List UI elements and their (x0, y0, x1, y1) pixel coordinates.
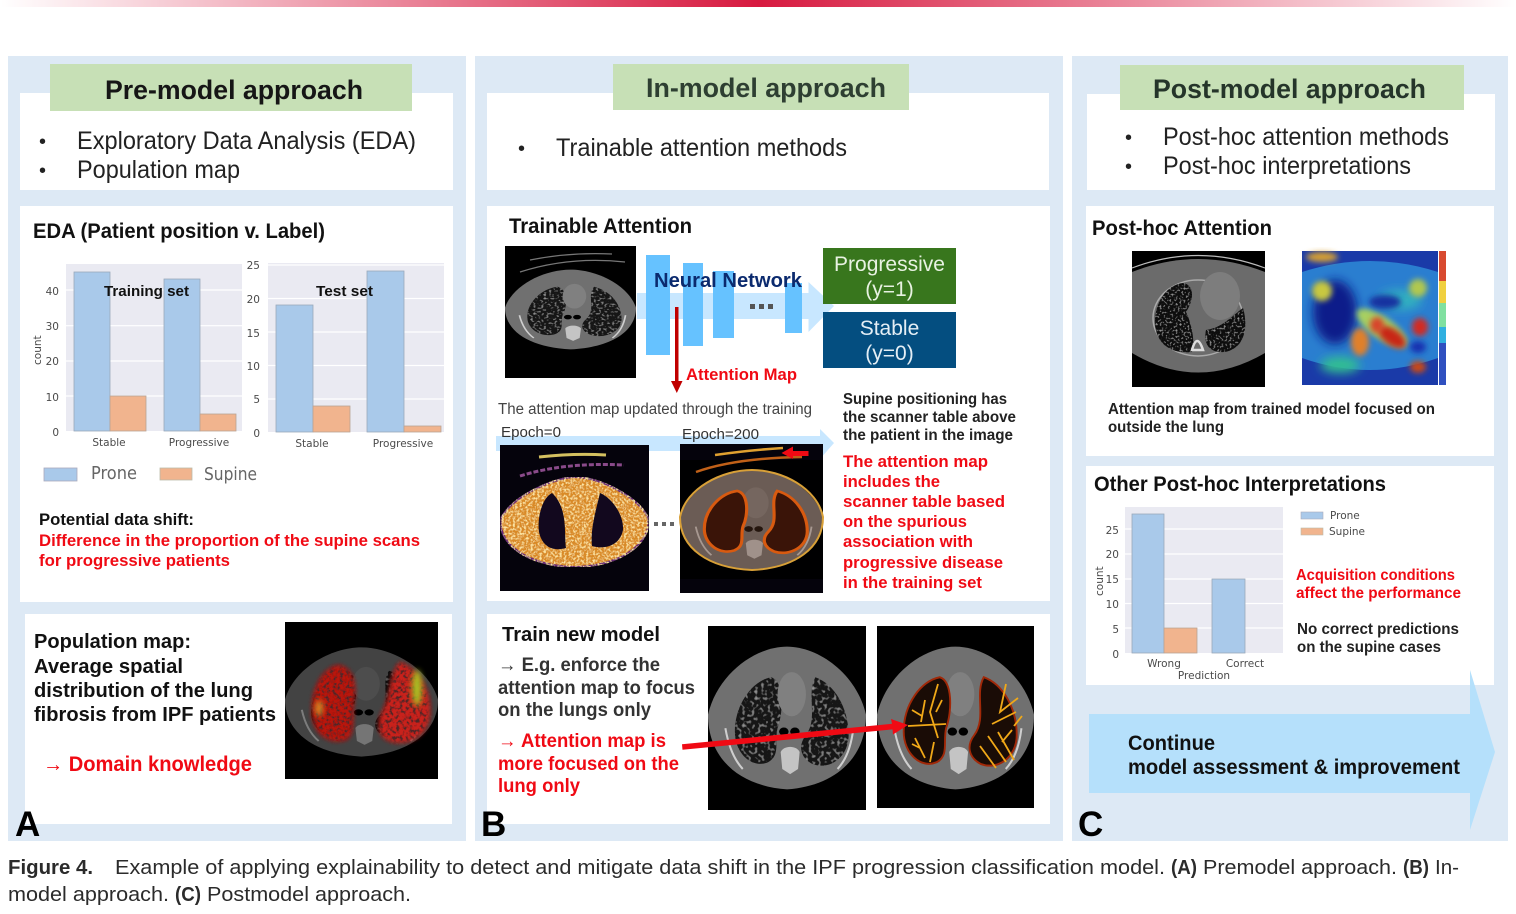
bar chart: training set: 30 (46, 321, 59, 333)
panel label C: C (1078, 805, 1103, 844)
panel C: post-model approach (1072, 56, 1508, 844)
bar chart: prediction: 0 (1112, 649, 1119, 661)
figure caption: (B) (1403, 856, 1429, 879)
figure caption: Example of applying explainability to detect and mitigate data shift in the IPF progression classification model. (115, 856, 1165, 879)
bar chart: training set: Training set (104, 283, 189, 300)
acquisition note: Acquisition conditions (1296, 567, 1455, 584)
arrow: continue improvement: model assessment & improvement (1128, 756, 1460, 779)
supine note: the patient in the image (843, 427, 1013, 444)
train new model text: attention map to focus (498, 678, 695, 699)
post-hoc attention caption: outside the lung (1108, 419, 1224, 436)
trainable attention box (487, 206, 1050, 601)
bar chart: training set: 10 (46, 392, 59, 404)
population map box (25, 614, 452, 824)
EDA box (20, 206, 453, 602)
train new model text: → Attention map is (498, 731, 666, 752)
top gradient bar (0, 0, 1516, 7)
bar chart: training set (32, 264, 242, 449)
figure caption: In- (1435, 856, 1459, 879)
legend: patient position: Supine (204, 464, 257, 485)
population map text: distribution of the lung (34, 679, 253, 702)
figure caption: Premodel approach. (1203, 856, 1397, 879)
image: heatmap (1302, 251, 1438, 385)
heading: pre-model approach: Pre-model approach (105, 75, 363, 105)
figure caption (8, 856, 1459, 906)
heading: post-model approach (1120, 65, 1464, 110)
legend: prediction chart: Supine (1329, 526, 1365, 538)
population map text: Average spatial (34, 655, 183, 678)
attention map finding: progressive disease (843, 553, 1003, 572)
bullet list box B: Trainable attention methods (556, 134, 847, 162)
legend: prediction chart: Prone (1330, 510, 1360, 522)
population map text: fibrosis from IPF patients (34, 703, 276, 726)
data shift note: Difference in the proportion of the supine scans (39, 532, 420, 550)
bullet list box A: Population map (77, 156, 240, 184)
data shift note: Potential data shift: (39, 511, 194, 529)
arrow: continue improvement: Continue (1128, 732, 1215, 755)
bar chart: test set: Stable (295, 438, 329, 450)
dots between epochs (654, 522, 674, 526)
bullet list box A: Exploratory Data Analysis (EDA) (77, 127, 416, 155)
legend: patient position (44, 463, 257, 485)
epoch 200 label: Epoch=200 (682, 426, 759, 443)
figure caption: model approach. (8, 883, 169, 906)
post-hoc attention title: Post-hoc Attention (1092, 217, 1272, 240)
bullet list box A: • (39, 131, 46, 153)
bar chart: test set: Test set (316, 283, 373, 300)
supine note: the scanner table above (843, 409, 1016, 426)
acquisition note: affect the performance (1296, 585, 1461, 602)
image: attention map epoch 200 (680, 444, 823, 593)
heading: post-model approach: Post-model approach (1153, 74, 1426, 104)
attention map finding (843, 452, 1005, 592)
heading: pre-model approach (50, 64, 412, 111)
arrow: attention focus (682, 719, 908, 750)
panel B: in-model approach (475, 56, 1063, 844)
image: population map CT (285, 622, 438, 779)
bar chart: prediction: 15 (1106, 574, 1119, 586)
output: progressive: (y=1) (865, 278, 914, 301)
train new model text (498, 655, 695, 797)
train new model text: on the lungs only (498, 700, 651, 721)
bullet list box A (20, 93, 453, 190)
attention map label: Attention Map (686, 365, 797, 384)
post-hoc attention caption (1108, 401, 1435, 436)
legend: prediction chart (1301, 510, 1365, 538)
attention map finding: includes the (843, 472, 940, 491)
legend: patient position: Prone (91, 463, 137, 484)
train new model text: lung only (498, 776, 580, 797)
bar chart: prediction: 10 (1106, 599, 1119, 611)
post-hoc attention box (1086, 206, 1494, 456)
attention map finding: on the spurious (843, 512, 967, 531)
output: progressive (823, 248, 956, 304)
bar chart: prediction (1094, 507, 1283, 682)
supine note: Supine positioning has (843, 391, 1007, 408)
colorbar (1439, 251, 1446, 385)
image: CT with focused attention (877, 626, 1034, 808)
arrow: attention map (671, 307, 682, 393)
bullet list box C: • (1125, 127, 1132, 149)
bullet list box B: • (518, 138, 525, 160)
panel label B: B (481, 805, 506, 844)
EDA title: EDA (Patient position v. Label) (33, 220, 325, 243)
bar chart: training set: 0 (52, 427, 59, 439)
bar chart: test set: 25 (247, 260, 260, 272)
neural network layers (646, 255, 802, 355)
bar chart: test set: 15 (247, 328, 260, 340)
supine predictions note: No correct predictions (1297, 621, 1459, 638)
population map text (34, 630, 276, 776)
bar chart: test set: 5 (253, 394, 260, 406)
supine note (843, 391, 1016, 444)
bullet list box C: Post-hoc interpretations (1163, 152, 1411, 180)
arrow: continue improvement (1089, 670, 1495, 830)
image: CT post-hoc (1132, 251, 1265, 387)
figure caption: (A) (1171, 856, 1197, 879)
bullet list box A: • (39, 160, 46, 182)
figure caption: Figure 4. (8, 856, 93, 879)
neural network label: Neural Network (654, 269, 803, 292)
output: stable: (y=0) (865, 342, 914, 365)
output: stable: Stable (860, 317, 919, 340)
bar chart: prediction: Prediction (1178, 670, 1230, 682)
training update caption: The attention map updated through the training (498, 401, 812, 418)
bar chart: prediction: Correct (1226, 658, 1264, 670)
bar chart: training set: 40 (46, 286, 59, 298)
heading: in-model approach (613, 64, 909, 110)
train new model title: Train new model (502, 624, 660, 646)
bar chart: training set: Stable (92, 437, 126, 449)
population map text: Population map: (34, 630, 191, 653)
bullet list box C: Post-hoc attention methods (1163, 123, 1449, 151)
bar chart: prediction: count (1094, 566, 1106, 596)
panel A: pre-model approach (8, 56, 466, 844)
trainable attention title: Trainable Attention (509, 215, 692, 238)
bar chart: test set: 0 (253, 428, 260, 440)
supine predictions note (1297, 621, 1459, 656)
bar chart: prediction: Wrong (1147, 658, 1181, 670)
arrow: epochs (496, 429, 834, 459)
bar chart: prediction: 20 (1106, 549, 1119, 561)
heading: in-model approach: In-model approach (646, 73, 886, 103)
image: input CT (505, 246, 636, 378)
bar chart: training set: Progressive (169, 437, 229, 449)
image: attention map epoch 0 (500, 445, 649, 591)
population map text: → Domain knowledge (43, 753, 252, 776)
post-hoc attention caption: Attention map from trained model focused on (1108, 401, 1435, 418)
bullet list box C: • (1125, 156, 1132, 178)
figure caption: (C) (175, 883, 201, 906)
attention map finding: The attention map (843, 452, 988, 471)
bar chart: test set: 10 (247, 361, 260, 373)
acquisition note (1296, 567, 1461, 602)
train new model text: more focused on the (498, 754, 679, 775)
bar chart: prediction: 5 (1112, 624, 1119, 636)
arrow: network flow (637, 282, 834, 332)
bar chart: test set (247, 260, 444, 450)
panel label A: A (15, 805, 40, 844)
data shift note (39, 511, 420, 570)
image: CT before (708, 626, 866, 810)
bullet list box C (1087, 94, 1495, 190)
attention map finding: scanner table based (843, 492, 1005, 511)
bar chart: test set: Progressive (373, 438, 433, 450)
epoch 0 label: Epoch=0 (501, 424, 561, 441)
attention map finding: in the training set (843, 573, 982, 592)
figure caption: Postmodel approach. (207, 883, 411, 906)
output: progressive: Progressive (834, 253, 945, 276)
other interpretations box (1086, 466, 1494, 685)
train new model box (487, 614, 1050, 824)
arrow: scanner table pointer (782, 446, 808, 459)
bar chart: prediction: 25 (1106, 525, 1119, 537)
bar chart: test set: 20 (247, 294, 260, 306)
attention map finding: association with (843, 532, 973, 551)
bar chart: training set: 20 (46, 356, 59, 368)
data shift note: for progressive patients (39, 552, 230, 570)
output: stable (823, 312, 956, 368)
train new model text: → E.g. enforce the (498, 655, 660, 676)
supine predictions note: on the supine cases (1297, 639, 1441, 656)
bullet list box B (487, 93, 1049, 190)
bar chart: training set: count (32, 335, 44, 365)
other interpretations title: Other Post-hoc Interpretations (1094, 473, 1386, 496)
